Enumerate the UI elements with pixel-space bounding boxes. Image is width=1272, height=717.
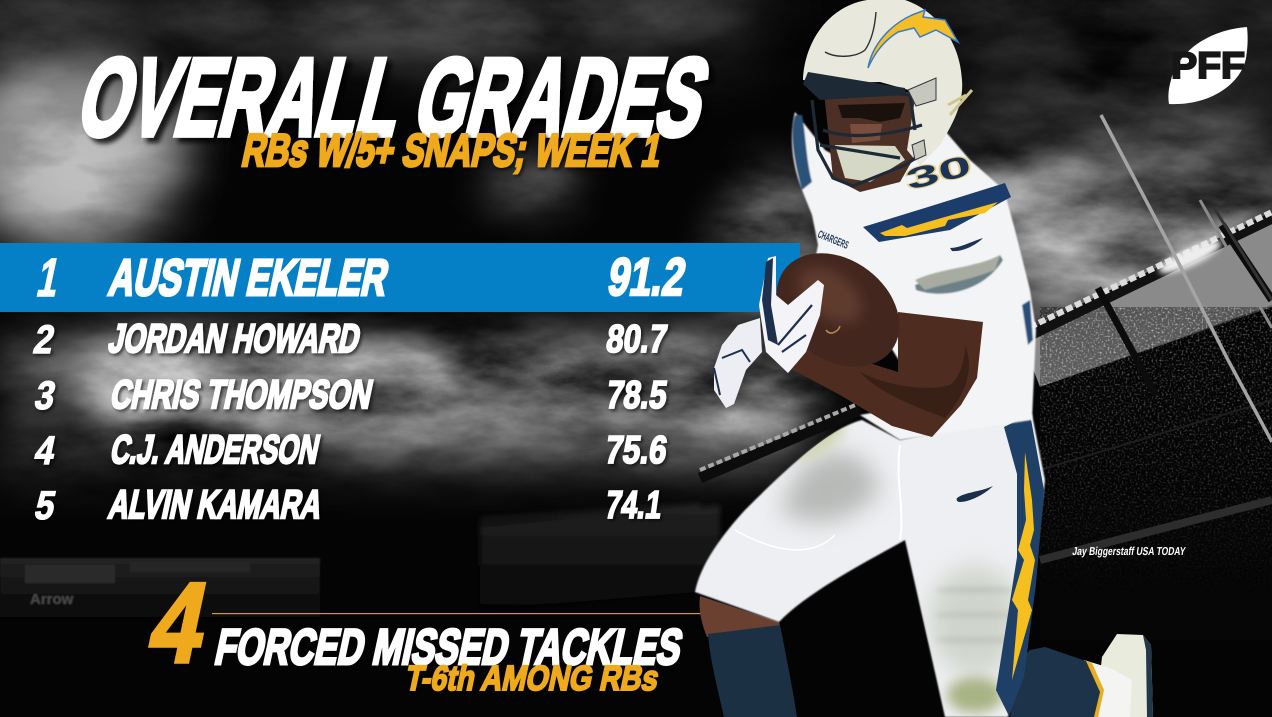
jersey number: 30	[903, 150, 975, 197]
right stadium sky wedge and seating	[1033, 224, 1272, 580]
rank 5 row	[31, 481, 665, 528]
forced missed tackles callout	[140, 560, 702, 698]
rank 2 row: 80.7	[604, 318, 670, 361]
rank 1 row: 1	[32, 248, 65, 308]
facemask	[806, 85, 925, 186]
left stadium light banks	[700, 403, 860, 478]
rank 2 row: JORDAN HOWARD	[105, 315, 365, 361]
blue highlight bar	[0, 243, 800, 312]
rank 3 row: 3	[31, 372, 60, 418]
callout rule	[212, 613, 702, 614]
subtitle: RBs W/5+ SNAPS; WEEK 1	[238, 124, 667, 176]
stadium lower-left scoreboard: Arrow	[30, 591, 74, 608]
player photo illustration	[695, 0, 1153, 717]
helmet visor clips	[908, 78, 936, 160]
photo credit: Jay Biggerstaff USA TODAY	[1072, 546, 1186, 558]
second glove	[714, 318, 762, 408]
rank 1 row: AUSTIN EKELER	[105, 249, 394, 306]
rank 1 row	[32, 248, 690, 308]
jersey	[792, 112, 1036, 440]
big number 4: 4	[140, 560, 219, 687]
white pants	[695, 414, 1045, 717]
rank 5 row: 74.1	[603, 484, 665, 527]
gloved hand on ball	[759, 256, 824, 373]
pants shading	[735, 413, 1021, 713]
rank 3 row	[31, 371, 670, 418]
shoulder lightning bolt	[880, 202, 998, 236]
rank 2 row: 2	[30, 316, 59, 362]
football	[754, 230, 922, 390]
callout subline: T-6th AMONG RBs	[402, 659, 663, 698]
right stadium light bank	[1030, 212, 1272, 395]
rank 4 row: 4	[31, 427, 60, 473]
front lower leg and sock	[699, 596, 797, 717]
stripe lightning bolt	[1012, 452, 1035, 680]
nose and cheek highlight	[850, 124, 882, 143]
stadium lower-left scoreboard	[0, 558, 320, 620]
rank 4 row	[31, 426, 670, 473]
rank 3 row: CHRIS THOMPSON	[107, 371, 377, 417]
neck and face	[824, 92, 924, 192]
rank 5 row: ALVIN KAMARA	[105, 481, 327, 527]
mouth guard chin	[835, 145, 905, 182]
rank 2 row	[30, 315, 670, 362]
chin strap	[948, 90, 972, 115]
helmet shell	[803, 0, 962, 166]
rank 1 row: 91.2	[604, 248, 690, 307]
jersey shoulder stripe	[863, 183, 1011, 242]
light poles	[1101, 115, 1272, 442]
helmet top ridge	[825, 12, 876, 56]
arm	[782, 312, 983, 437]
logo wordmark: PFF	[1171, 45, 1245, 86]
helmet bolt decal	[868, 10, 958, 68]
rank 4 row: 75.6	[603, 429, 670, 472]
helmet	[803, 0, 972, 192]
jersey wordmark: CHARGERS	[816, 229, 850, 252]
eye shadow band	[838, 103, 905, 122]
rank 4 row: C.J. ANDERSON	[107, 426, 324, 472]
title: OVERALL GRADES	[68, 36, 721, 159]
jersey chest swoosh	[950, 238, 983, 251]
pants side stripe	[996, 414, 1044, 716]
center stadium roofline	[480, 505, 720, 610]
smooth gray storm glow at upper left	[0, 55, 185, 245]
pants logo swoosh	[957, 486, 993, 502]
rank 5 row: 5	[31, 482, 60, 528]
rank 3 row: 78.5	[604, 374, 670, 417]
logo football	[1168, 27, 1248, 104]
rear lower leg and shoe	[1010, 634, 1153, 717]
callout headline: FORCED MISSED TACKLES	[211, 619, 688, 675]
PFF logo	[1168, 27, 1248, 104]
